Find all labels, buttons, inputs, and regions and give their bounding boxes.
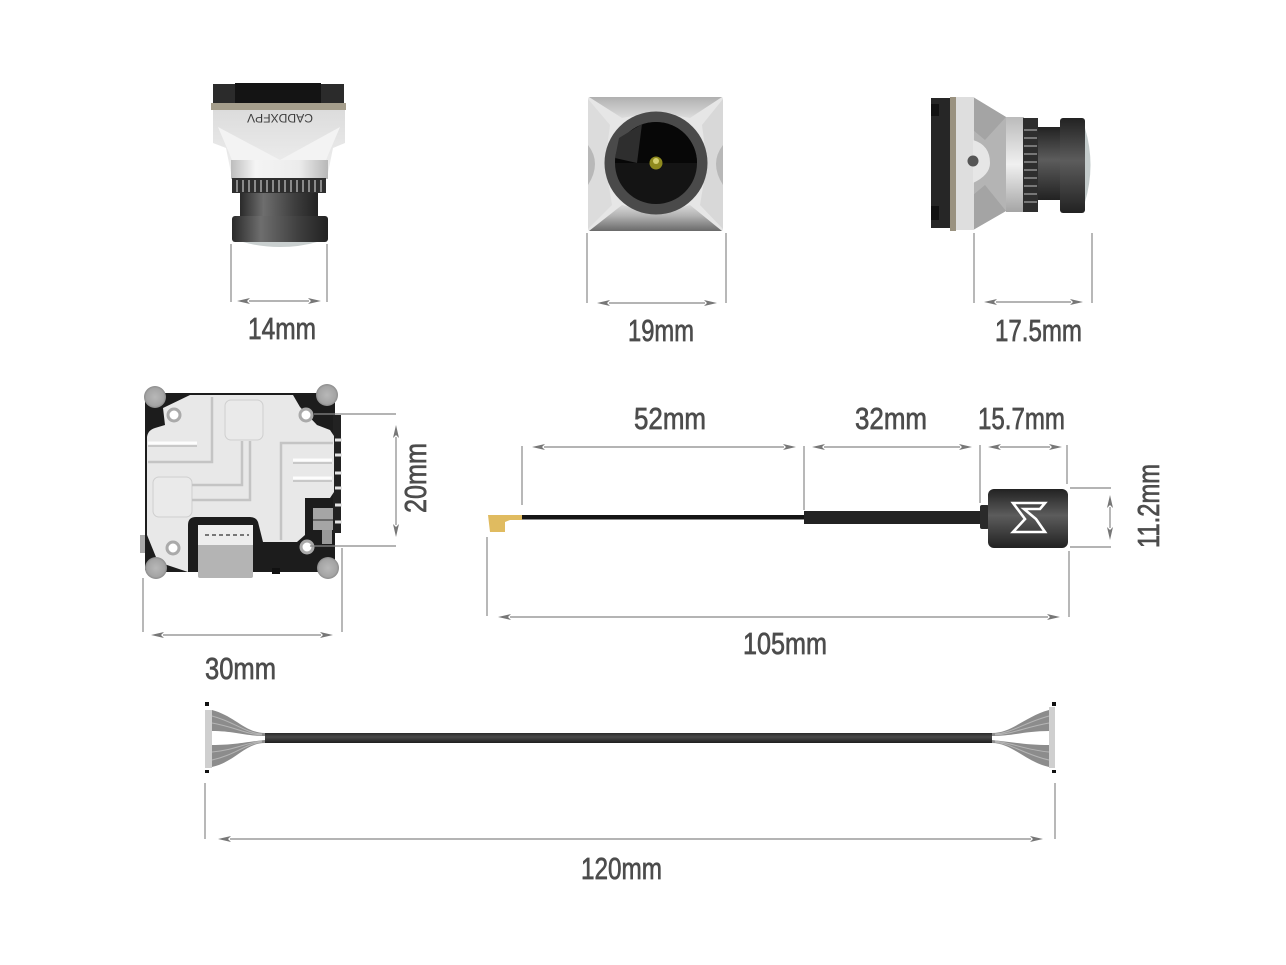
dimension: 15.7mm [978,401,1067,503]
heat sink plate [147,395,334,572]
dimension: 20mm [310,414,433,546]
camera side view [931,97,1090,231]
camera front view [588,97,723,231]
dimension: 19mm: 19mm [628,313,694,348]
dimension: 19mm [587,233,726,348]
antenna [488,489,1068,548]
dimension: 14mm [231,244,327,346]
icon: antenna logo [1013,503,1045,532]
VTX module [140,384,342,579]
dimension: 105mm [487,537,1069,661]
dimension: 105mm: 105mm [743,626,827,661]
dimension: 14mm: 14mm [248,311,316,346]
dimension: 30mm: 30mm [205,651,276,686]
dimension: 17.5mm: 17.5mm [995,313,1082,348]
camera top view [211,83,346,247]
dimension: 120mm [205,783,1055,886]
dimension: 30mm [143,548,342,686]
dimension: 32mm: 32mm [855,401,927,436]
dimension: 17.5mm [974,233,1092,348]
dimension: 52mm: 52mm [634,401,706,436]
dimension: 11.2mm [1070,464,1166,548]
dimension: 20mm: 20mm [398,443,433,513]
dimension: 120mm: 120mm [581,851,662,886]
dimension: 15.7mm: 15.7mm [978,401,1065,436]
dimension: 11.2mm: 11.2mm [1131,464,1166,548]
ribbon cable [205,702,1056,773]
USB-C port [198,525,253,578]
camera brand text: CADDXFPV [247,111,313,125]
